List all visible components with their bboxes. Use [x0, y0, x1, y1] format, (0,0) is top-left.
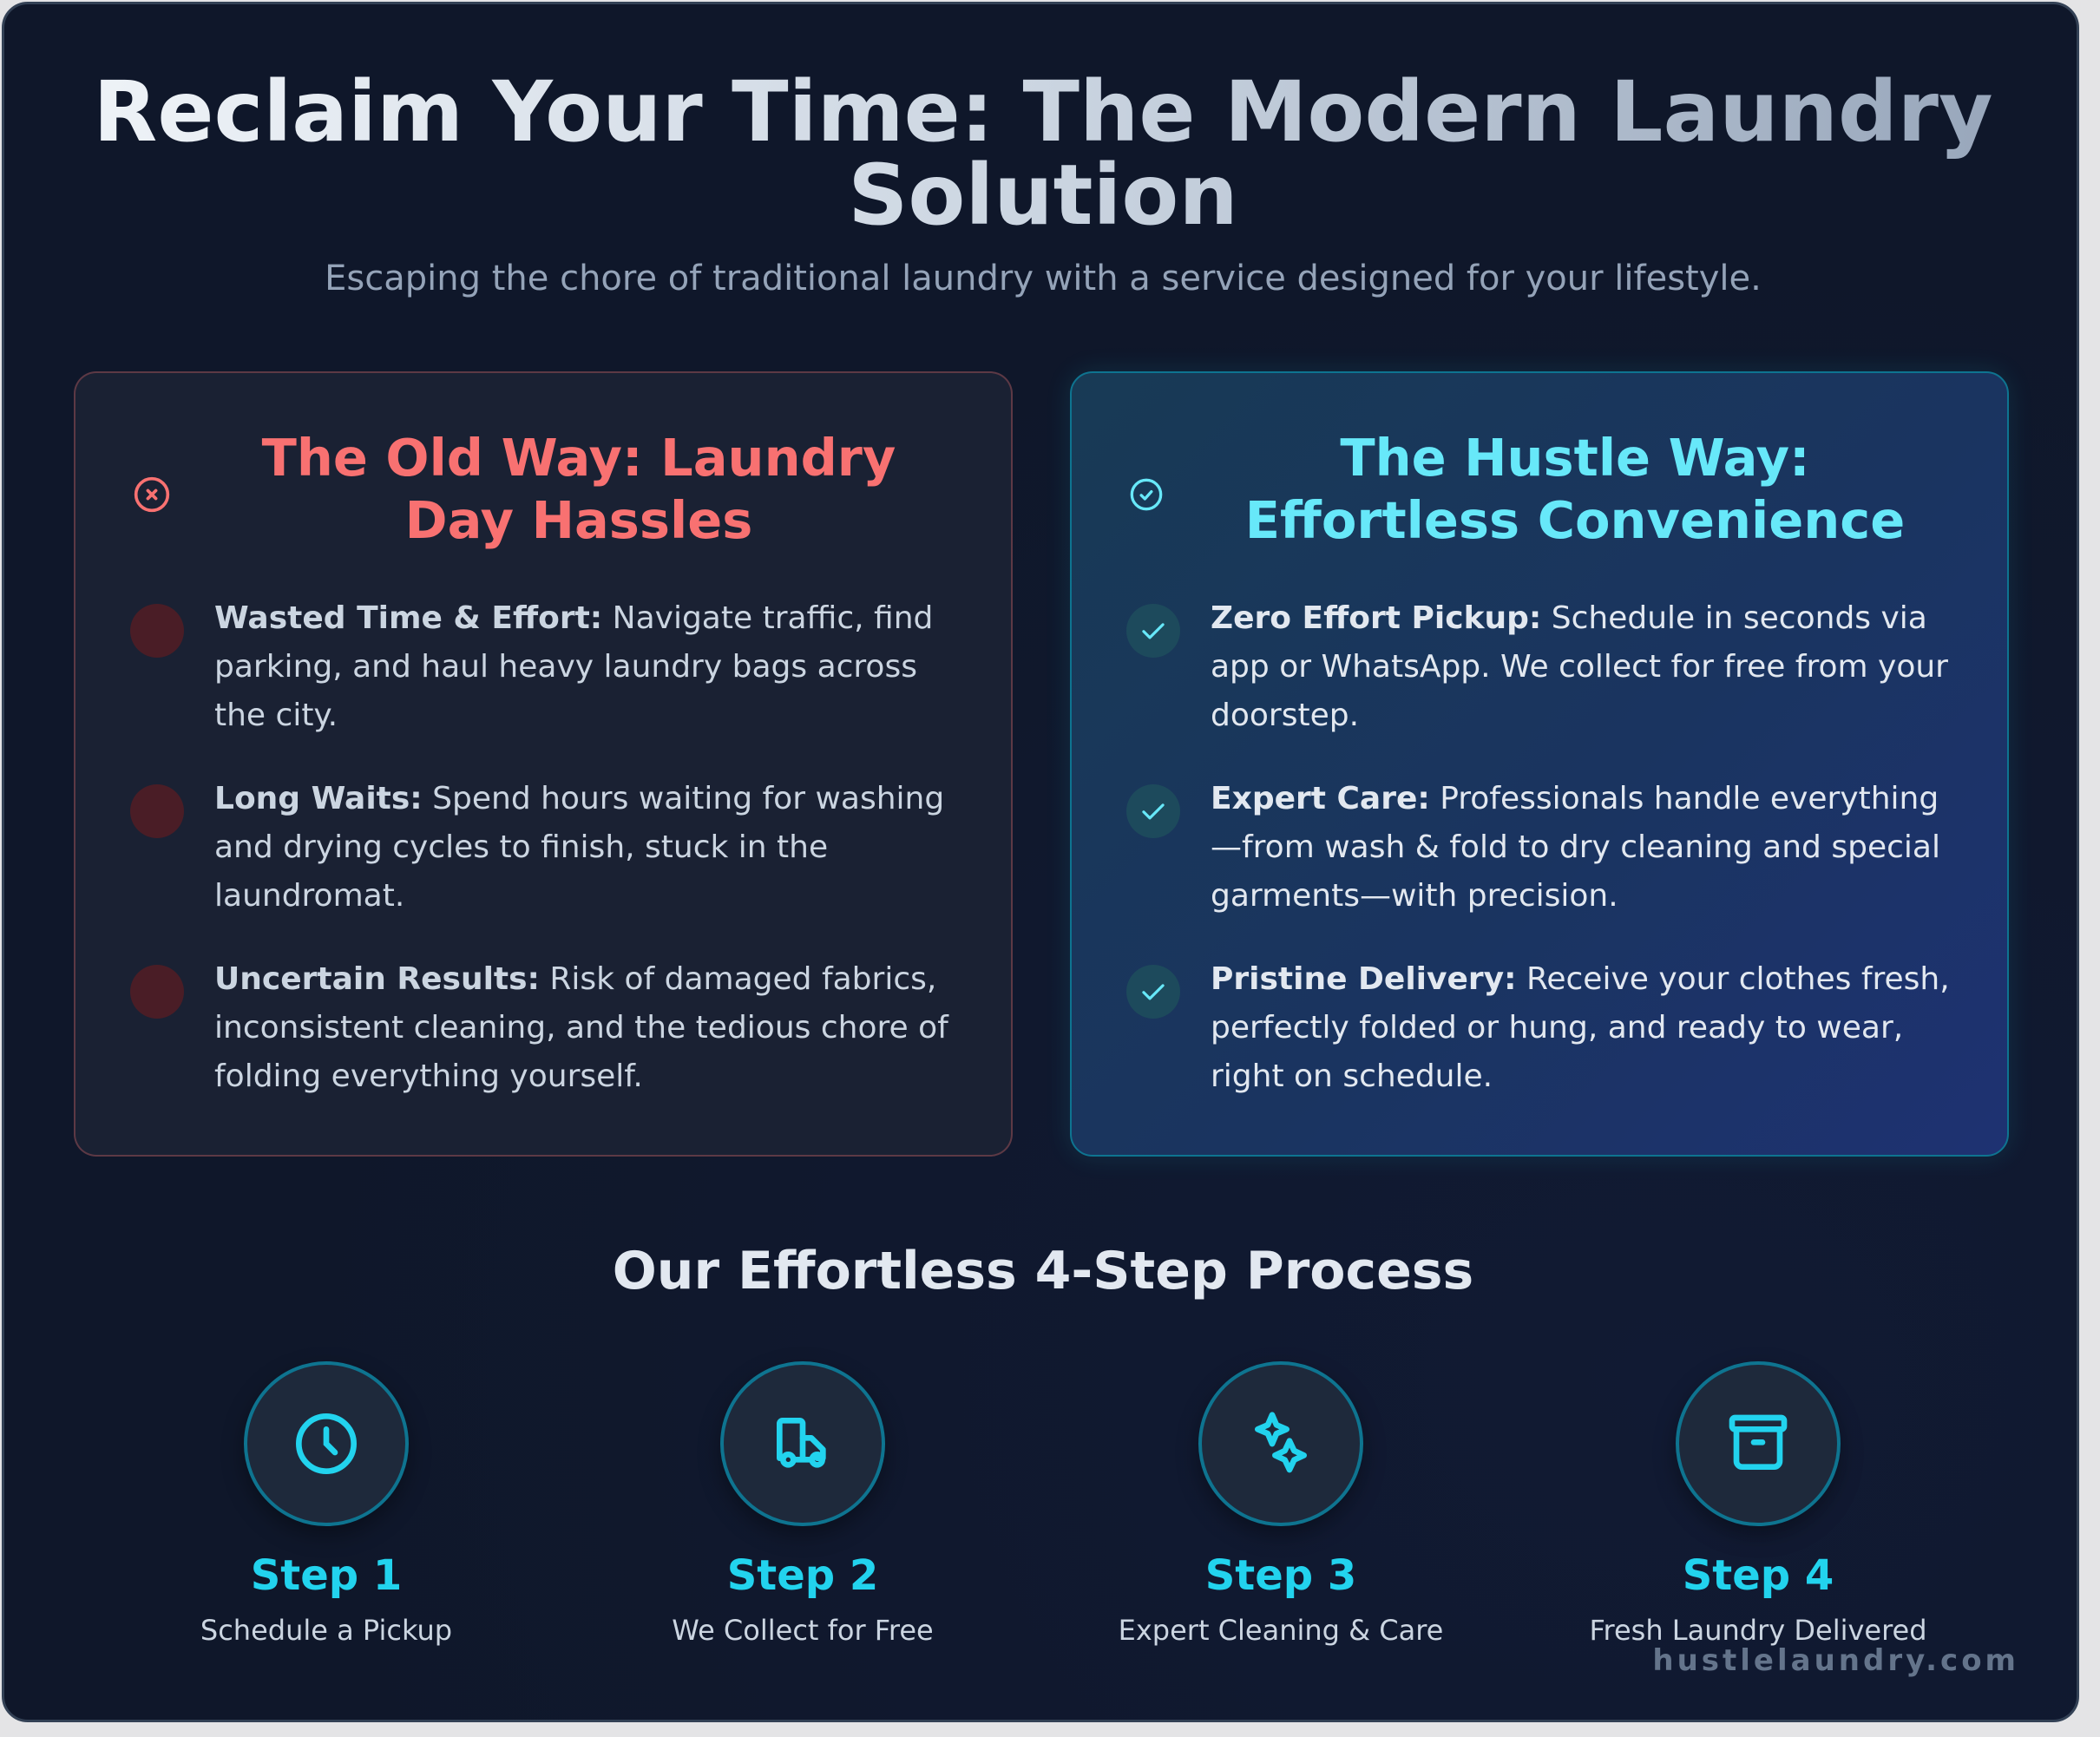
panel: hustle way: [1070, 371, 2009, 1157]
bullet 3: [130, 965, 184, 1019]
title: [4, 70, 2082, 237]
process heading: Our Effortless 4-Step Process: [613, 1241, 1473, 1301]
icon: truck: [720, 1361, 885, 1526]
title: Solution: [848, 147, 1238, 244]
step 1: [200, 1361, 452, 1647]
icon: sparkles: [1198, 1361, 1363, 1526]
item: pristine delivery: Pristine Delivery: Receive your clothes fresh, perfectly folded or hung, and ready to wear, right on schedule.: [1211, 961, 1950, 1094]
item: expert care: Expert Care: Professionals handle everything —from wash & fold to dry cleaning and special garments—with precision.: [1211, 781, 1940, 914]
step 1: Step 1: [251, 1551, 402, 1600]
heading: hustle way: Effortless Convenience: [1245, 490, 1905, 550]
subtitle: Escaping the chore of traditional laundry with a service designed for your lifestyle.: [325, 259, 1762, 298]
icon: box: [1676, 1361, 1841, 1526]
step 4: [1589, 1361, 1927, 1647]
heading: old way: The Old Way: Laundry: [262, 428, 896, 488]
title: Reclaim Your Time: The Modern Laundry: [93, 63, 1993, 161]
heading: old way: Day Hassles: [405, 490, 752, 550]
icon: x circle: [134, 477, 170, 512]
step 4: Step 4: [1683, 1551, 1834, 1600]
check 3: [1126, 965, 1180, 1019]
check 1: [1126, 604, 1180, 658]
heading: old way: [262, 428, 896, 550]
step 2: We Collect for Free: [672, 1614, 934, 1647]
step 2: Step 2: [727, 1551, 878, 1600]
item: uncertain results: Uncertain Results: Risk of damaged fabrics, inconsistent cleaning, and the tedious chore of folding everything yourself.: [214, 961, 948, 1094]
step 3: [1119, 1361, 1443, 1647]
item: long waits: Long Waits: Spend hours waiting for washing and drying cycles to finish, stuck in the laundromat.: [214, 781, 944, 914]
heading: hustle way: The Hustle Way:: [1340, 428, 1810, 488]
bullet 2: [130, 784, 184, 838]
item: zero effort pickup: Zero Effort Pickup: Schedule in seconds via app or WhatsApp. We collect for free from your doorstep.: [1211, 600, 1948, 733]
panel: old way: [74, 371, 1013, 1157]
step 3: Expert Cleaning & Care: [1119, 1614, 1443, 1647]
step 3: Step 3: [1205, 1551, 1356, 1600]
icon: check circle: [1130, 479, 1163, 510]
check 2: [1126, 784, 1180, 838]
bullet 1: [130, 604, 184, 658]
heading: hustle way: [1245, 428, 1905, 550]
icon: clock: [244, 1361, 409, 1526]
step 4: Fresh Laundry Delivered: [1589, 1614, 1927, 1647]
item: wasted time: Wasted Time & Effort: Navigate traffic, find parking, and haul heavy laundry bags across the city.: [214, 600, 933, 733]
step 2: [672, 1361, 934, 1647]
step 1: Schedule a Pickup: [200, 1614, 452, 1647]
watermark: hustlelaundry.com: [1652, 1643, 2019, 1678]
